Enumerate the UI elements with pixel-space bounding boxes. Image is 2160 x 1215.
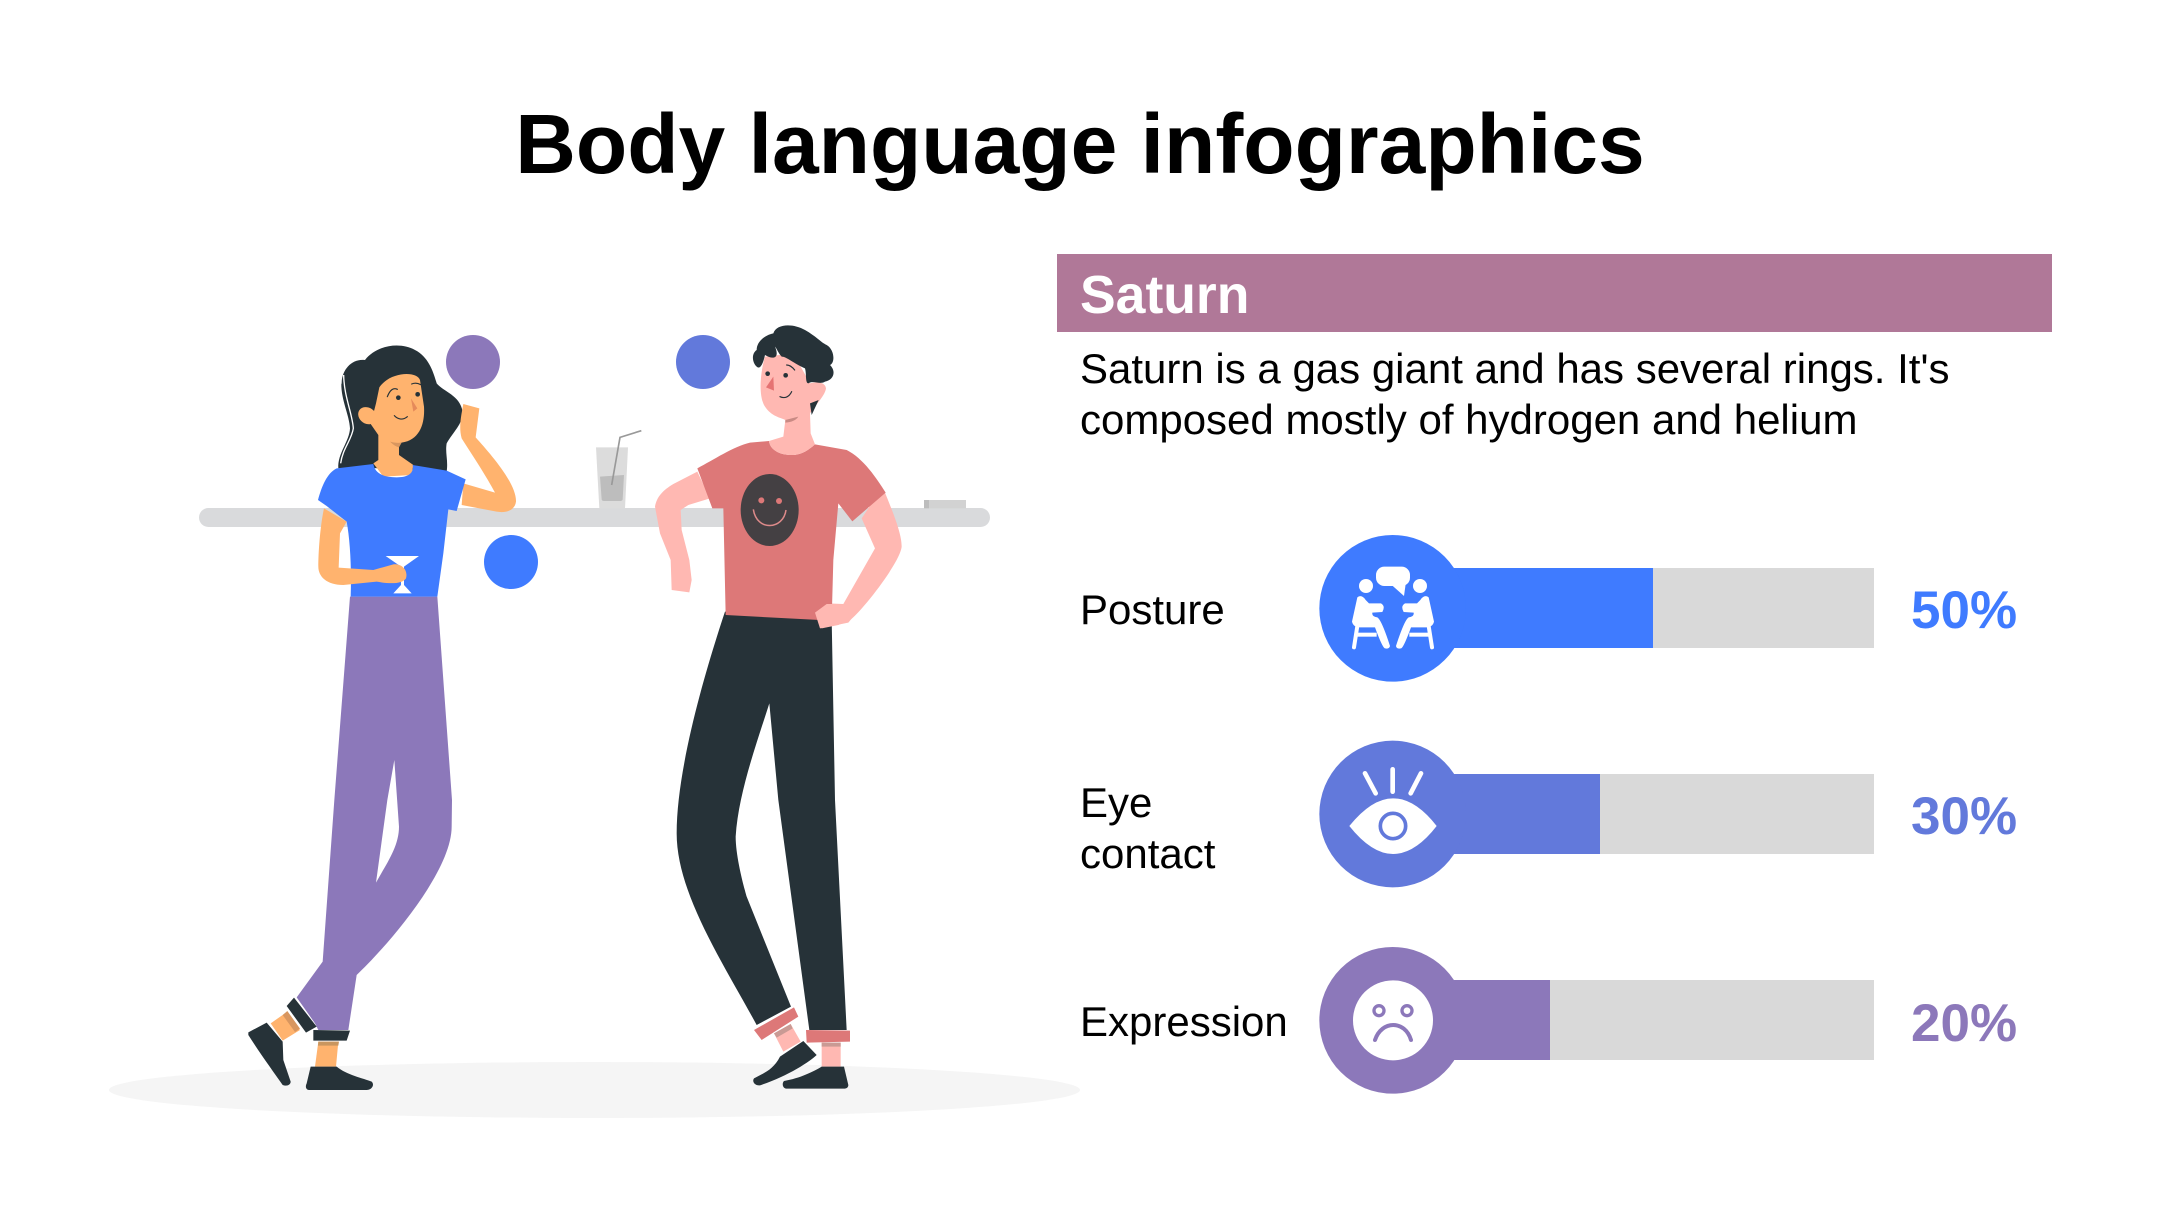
value: 30% [1911, 787, 2017, 846]
text block: Saturn description: Saturn is a gas giant and has several rings. It's [1080, 345, 1950, 392]
glass with straw [596, 431, 641, 508]
progress bar [1393, 774, 1874, 854]
progress bar [1393, 568, 1874, 648]
icon: sad face [1319, 947, 1466, 1094]
panel: Saturn header: Saturn [1080, 266, 1249, 325]
label: Expression [1080, 998, 1288, 1045]
row: Posture 50% [1080, 535, 2017, 682]
man figure [655, 325, 902, 1089]
value: 20% [1911, 994, 2017, 1053]
label: Posture [1080, 586, 1225, 633]
progress bar [1393, 980, 1874, 1060]
label: Eye [1080, 779, 1152, 826]
text block: Saturn description [1080, 345, 1950, 443]
icon: eye [1319, 741, 1466, 887]
dot: periwinkle [676, 335, 730, 389]
panel: Saturn header [1057, 254, 2052, 332]
object on counter [924, 500, 966, 508]
floor shadow [109, 1062, 1080, 1118]
title: Body language infographics [515, 97, 1645, 191]
dot: purple [446, 335, 500, 389]
woman figure [248, 346, 516, 1090]
label [1080, 779, 1216, 877]
text block: Saturn description: composed mostly of hydrogen and helium [1080, 396, 1857, 443]
row: Expression 20% [1080, 947, 2017, 1094]
dot: blue [484, 535, 538, 589]
row: Eye contact 30% [1080, 741, 2017, 887]
icon: people talking [1319, 535, 1466, 682]
bar counter [199, 508, 990, 527]
illustration: two people at a bar [109, 325, 1080, 1118]
value: 50% [1911, 581, 2017, 640]
label: contact [1080, 830, 1216, 877]
